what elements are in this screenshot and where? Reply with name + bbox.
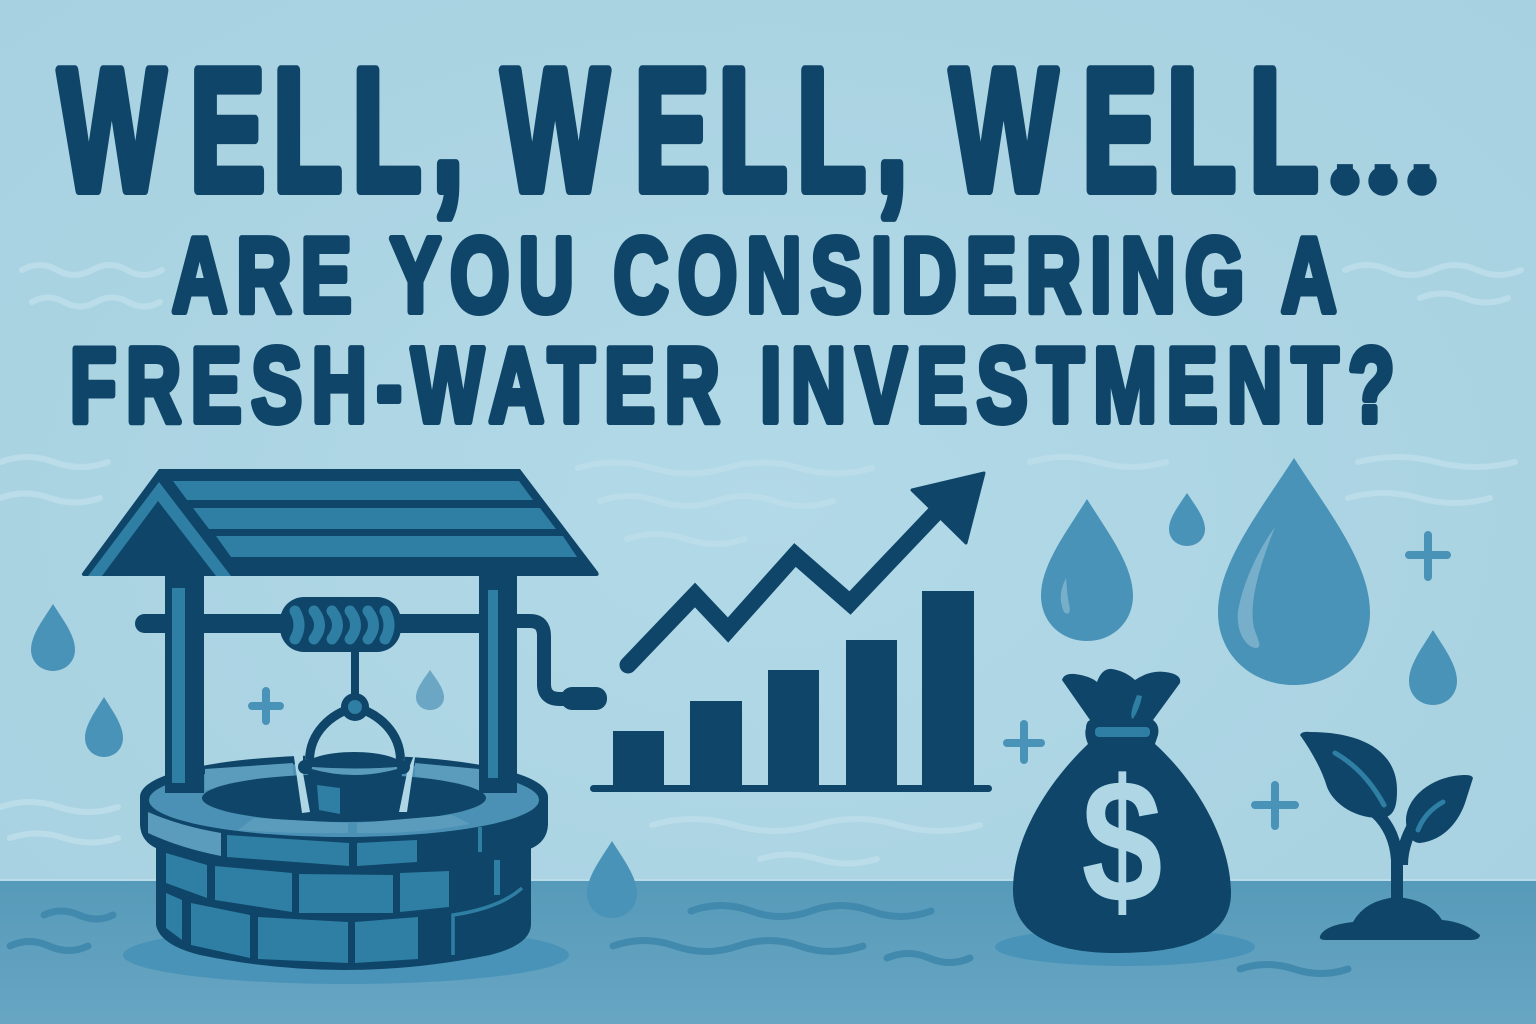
rising arrow: [628, 473, 984, 665]
bag body: [1013, 669, 1231, 953]
rope drum: [280, 597, 401, 652]
rim top surface: [149, 763, 539, 837]
left post: [165, 575, 204, 793]
stems: [1375, 812, 1420, 905]
drop: left low: [85, 697, 123, 757]
bag tie: [1095, 727, 1150, 737]
well rim: [140, 755, 548, 865]
axle: [135, 614, 490, 633]
chart baseline: [590, 785, 992, 792]
title line 3: FRESH-WATER INVESTMENT?: [70, 325, 1395, 444]
plus: well: [252, 691, 280, 721]
bag highlight: [1131, 695, 1142, 719]
bag shadow: [995, 928, 1255, 966]
right post: [479, 575, 517, 793]
icon: growth bar chart with arrow: [590, 473, 992, 792]
water ripples on ground: [10, 906, 1348, 974]
plus: bag right: [1255, 785, 1295, 826]
plus: upper right: [1409, 535, 1447, 577]
drop: ground: [587, 841, 637, 918]
drop: medium: [1041, 499, 1133, 641]
drop: far left: [31, 604, 75, 671]
drop: small top: [1169, 493, 1205, 546]
drop: inside well: [416, 670, 444, 710]
drop: right: [1409, 630, 1457, 705]
icon: money bag: [995, 669, 1255, 966]
back of rim strip: [205, 763, 479, 790]
bars: [613, 591, 974, 787]
ground band: [0, 879, 1536, 1024]
brick crack line: [453, 888, 522, 955]
roof gable strip: [88, 482, 231, 576]
roof planks: [173, 481, 577, 557]
plus: left of bag: [1007, 724, 1041, 760]
title line 1: WELL, WELL, WELL...: [59, 33, 1437, 228]
crank handle: [517, 621, 607, 710]
leaf veins: [1335, 753, 1443, 830]
well shadow: [123, 926, 569, 984]
left leaf: [1300, 732, 1397, 818]
title: [59, 33, 1437, 444]
rim stones: [148, 812, 470, 856]
soil mound: [1320, 897, 1480, 940]
plus signs: [252, 535, 1447, 826]
wall bricks: [166, 827, 500, 963]
well stone body: [156, 835, 531, 970]
title line 2: ARE YOU CONSIDERING A: [172, 215, 1336, 334]
water drops: [31, 458, 1457, 918]
icon: seedling: [1300, 732, 1480, 940]
right leaf: [1406, 775, 1473, 843]
icon: water well: [82, 469, 607, 984]
bucket: [293, 707, 416, 814]
well opening: [202, 774, 486, 822]
roof: [82, 469, 599, 576]
drop: large: [1218, 458, 1370, 685]
dollar sign: $: [1081, 744, 1163, 940]
rope and pulley: [341, 650, 369, 721]
